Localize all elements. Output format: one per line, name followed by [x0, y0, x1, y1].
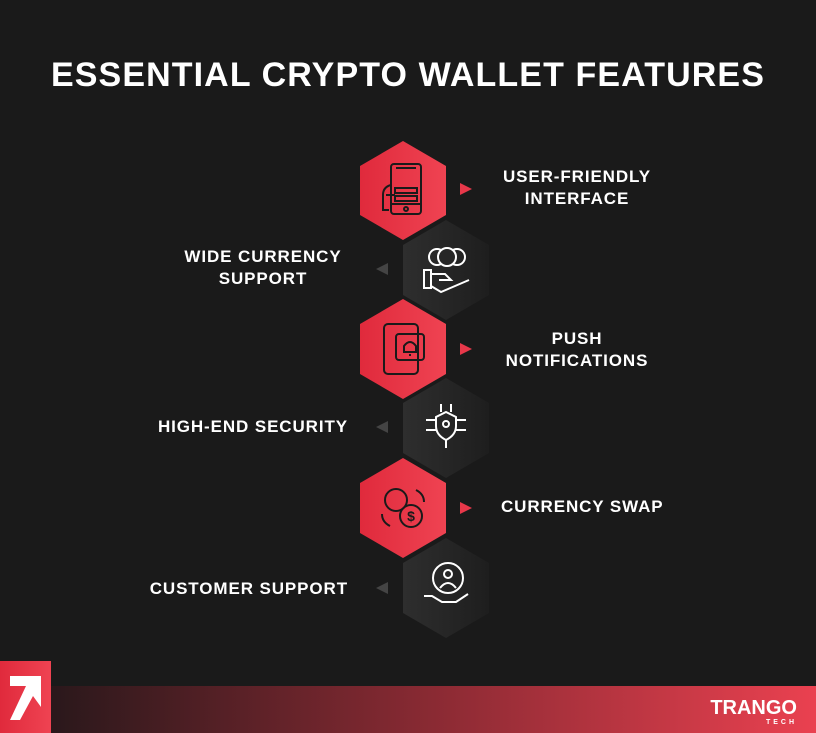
arrows — [460, 183, 472, 514]
dark hex: high-end security — [403, 378, 489, 478]
dark hex: wide currency support — [403, 220, 489, 320]
label: push notifications: PUSH — [552, 329, 602, 348]
red hex: push notifications — [360, 299, 446, 399]
label: high-end security: HIGH-END SECURITY — [158, 417, 348, 436]
label: currency swap: CURRENCY SWAP — [501, 497, 664, 516]
red hex: user-friendly interface — [360, 141, 446, 240]
label: user-friendly interface: USER-FRIENDLY — [503, 167, 651, 186]
label: wide currency support: WIDE CURRENCY — [184, 247, 342, 266]
title: ESSENTIAL CRYPTO WALLET FEATURES — [51, 56, 765, 94]
logo square — [0, 661, 51, 733]
brand: TRANGO — [710, 697, 797, 719]
red hex: currency swap — [360, 458, 446, 558]
label: user-friendly interface: INTERFACE — [525, 189, 629, 208]
label: push notifications: NOTIFICATIONS — [506, 351, 648, 370]
dark hex: customer support — [403, 538, 489, 638]
brand: TECH — [766, 719, 797, 726]
label: wide currency support — [184, 247, 342, 288]
red hex: currency swap: $ — [407, 508, 415, 524]
label: user-friendly interface — [503, 167, 651, 208]
label: wide currency support: SUPPORT — [219, 269, 307, 288]
label: customer support: CUSTOMER SUPPORT — [150, 579, 348, 598]
label: push notifications — [506, 329, 648, 370]
footer bar — [51, 686, 816, 733]
